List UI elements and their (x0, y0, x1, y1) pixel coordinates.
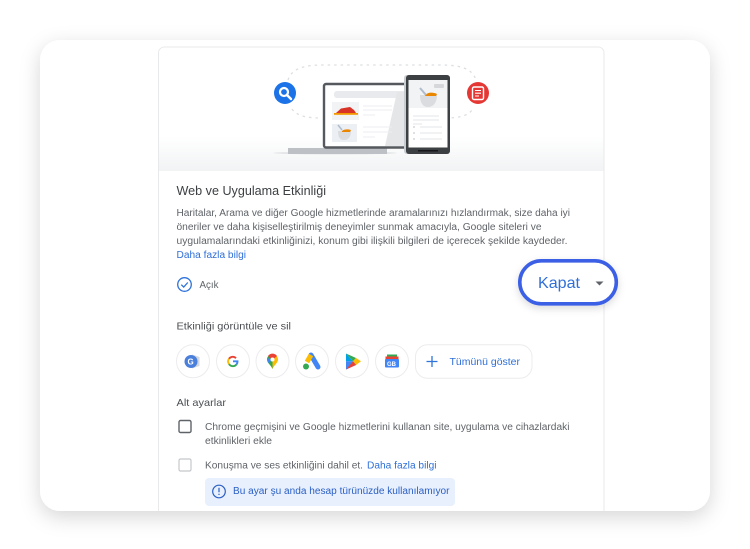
heading: view and delete activity: Etkinliği görüntüle ve sil (176, 320, 291, 332)
option: voice activity: Daha fazla bilgi (367, 460, 436, 472)
icon: ads (296, 345, 328, 378)
icon: translate: G (188, 358, 194, 366)
illustration header (159, 64, 604, 171)
button: show all: Tümünü göster (450, 357, 521, 368)
icon: google (216, 345, 250, 378)
title: Web ve Uygulama Etkinliği (176, 183, 326, 198)
icon: news: GB (387, 362, 397, 368)
description (176, 208, 570, 247)
icon: play (336, 345, 368, 378)
heading: sub settings: Alt ayarlar (176, 397, 227, 409)
info notice: Bu ayar şu anda hesap türünüzde kullanılamıyor (233, 486, 450, 497)
option: chrome history: etkinlikleri ekle (205, 436, 272, 447)
description: öneriler ve daha kişiselleştirilmiş deneyimler sunmak amacıyla, Google siteleri ve (176, 222, 542, 233)
icon: document (467, 82, 489, 104)
info notice (205, 478, 455, 506)
option: voice activity: Konuşma ve ses etkinliğini dahil et. (205, 460, 363, 472)
icon: translate (176, 345, 210, 378)
description: uygulamalarındaki etkinliğinizi, konum gibi ilişkili bilgileri de içerecek şekilde kaydeder. (176, 236, 568, 247)
dotted loop (288, 65, 476, 118)
icon: search (274, 82, 296, 104)
option: chrome history: Chrome geçmişini ve Google hizmetlerini kullanan site, uygulama ve cihazlardaki (205, 422, 570, 433)
highlighted button: turn off: Kapat (538, 275, 581, 292)
button: show all (416, 345, 532, 378)
card (40, 40, 710, 530)
option: chrome history (179, 420, 570, 447)
icon: info (213, 485, 225, 498)
highlighted button: turn off (520, 261, 616, 304)
option: voice activity (179, 459, 436, 472)
product icons (176, 345, 532, 378)
description: Haritalar, Arama ve diğer Google hizmetlerinde aramalarınızı hızlandırmak, size daha iyi (176, 208, 570, 219)
link: more info: Daha fazla bilgi (176, 250, 246, 261)
status: on: Açık (200, 280, 219, 291)
icon: maps (256, 345, 289, 378)
illustration artwork (273, 65, 489, 154)
laptop (273, 84, 409, 154)
status: on (178, 278, 219, 291)
icon: news (376, 345, 408, 378)
settings panel (158, 47, 604, 530)
phone (404, 75, 450, 154)
